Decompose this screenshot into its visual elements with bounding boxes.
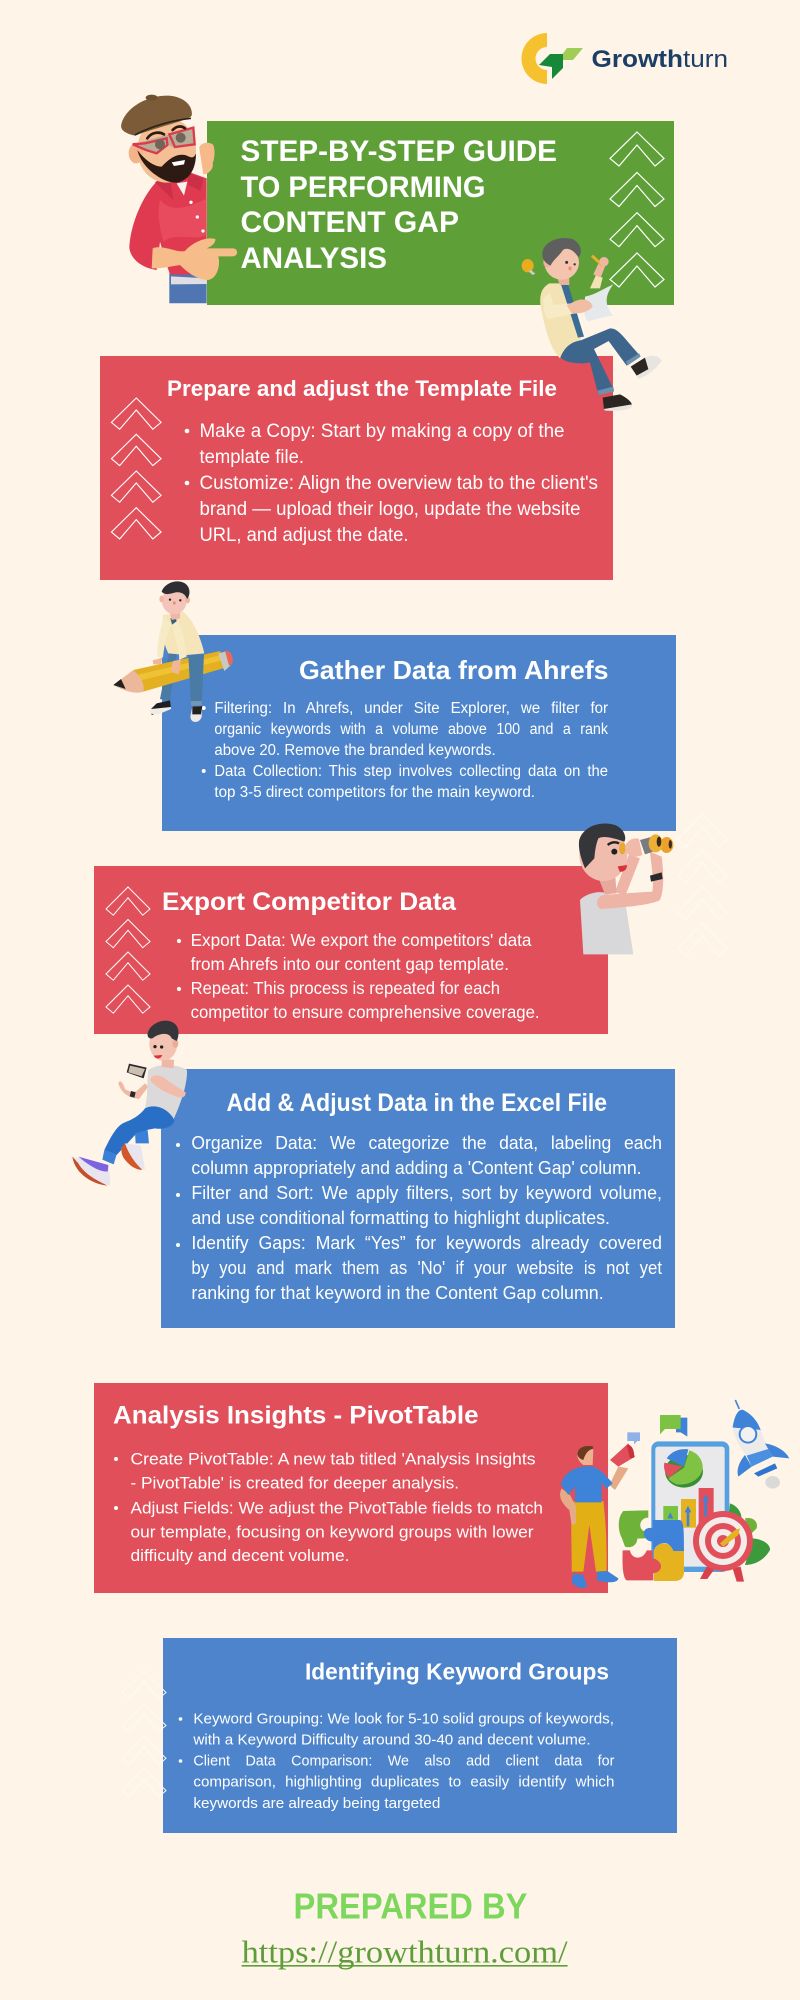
rocket [733,1400,789,1489]
heading: analysis insights: Analysis Insights - PivotTable [113,1401,479,1429]
puzzle pieces [619,1510,684,1581]
bullet list: analysis insights: Create PivotTable: A new tab titled 'Analysis Insights [130,1449,536,1468]
title heading [240,135,557,275]
chevron column: export [106,887,150,1013]
speech bubbles [627,1415,687,1444]
bullet list: analysis insights [114,1449,543,1565]
bullet list: prepare: template file. [200,447,304,468]
panel: export competitor data [94,866,608,1034]
chevron column: identifying keyword groups [122,1670,166,1797]
bullet list: gather data: Filtering: In Ahrefs, under Site Explorer, we filter for [214,700,608,717]
panel: gather data from ahrefs [162,635,676,831]
chevron column: prepare [111,398,161,539]
logo: Growthturn: Growth [592,46,683,73]
bullet list: prepare [185,421,598,546]
illustration: man with beret pointing at title [121,95,237,303]
bullet list: identifying keyword groups: with a Keyword Difficulty around 30-40 and decent volume. [192,1732,591,1748]
bullet list: export [177,930,540,1022]
panel: add and adjust data in the excel file [161,1069,675,1328]
target [693,1511,753,1582]
bullet list: identifying keyword groups: Keyword Grouping: We look for 5-10 solid groups of keywords, [193,1711,614,1728]
illustration: person with binoculars [579,824,673,954]
panel: prepare and adjust the template file [100,356,613,580]
heading: prepare: Prepare and adjust the Template File [167,376,557,401]
heading: gather data: Gather Data from Ahrefs [299,655,608,685]
bullet list: add and adjust: Organize Data: We categorize the data, labeling each [191,1133,662,1153]
bullet list: gather data: organic keywords with a volume above 100 and a rank [214,721,608,738]
bullet list: export: Export Data: We export the competitors' data [191,930,532,950]
bullet list: add and adjust: by you and mark them as 'No' if your website is not yet [191,1258,662,1278]
panel: identifying keyword groups [163,1638,677,1833]
bullet list: add and adjust: column appropriately and adding a 'Content Gap' column. [191,1158,642,1178]
bullet list: analysis insights: our template, focusing on keyword groups with lower [130,1522,534,1542]
footer link: https://growthturn.com/ [242,1934,568,1970]
heading: export: Export Competitor Data [162,888,457,916]
heading: identifying keyword groups: Identifying Keyword Groups [305,1658,609,1684]
chevron column: title panel [610,132,664,287]
bullet list: prepare: Make a Copy: Start by making a copy of the [200,421,564,442]
panel: analysis insights pivot table [94,1383,608,1593]
phone with charts [651,1441,729,1572]
title heading: STEP-BY-STEP GUIDE [240,135,557,168]
illustration: person floating with phone [72,1021,187,1186]
footer heading: prepared by: PREPARED BY [294,1885,528,1926]
decorative faint chevrons: right margin [678,814,727,956]
heading: add and adjust: Add & Adjust Data in the Excel File [226,1089,607,1117]
logo: Growthturn: turn [683,46,728,73]
bullet list: add and adjust: Identify Gaps: Mark “Yes” for keywords already covered [191,1233,662,1253]
bullet list: gather data [202,700,608,801]
bullet list: add and adjust: ranking for that keyword in the Content Gap column. [191,1283,604,1303]
bullet list: analysis insights: difficulty and decent volume. [130,1546,350,1565]
leaves [728,1503,770,1565]
title panel [207,121,674,305]
bullet list: gather data: Data Collection: This step involves collecting data on the [214,763,608,780]
illustration: marketing team with rocket, phone, puzzle and target [560,1400,789,1588]
illustration: person sitting with paper and pencil [522,238,662,411]
illustration: person riding a pencil [113,581,233,722]
bullet list: analysis insights: - PivotTable' is created for deeper analysis. [130,1474,459,1492]
bullet list: add and adjust: and use conditional formatting to highlight duplicates. [191,1208,610,1228]
title heading: TO PERFORMING [240,171,486,204]
bullet list: prepare: Customize: Align the overview tab to the client's [200,473,598,494]
bullet list: gather data: top 3-5 direct competitors for the main keyword. [214,784,535,801]
bullet list: identifying keyword groups: comparison, highlighting duplicates to easily identify which [193,1774,614,1791]
bullet list: identifying keyword groups: keywords are already being targeted [193,1795,440,1812]
title heading: CONTENT GAP [240,206,459,239]
person with megaphone [560,1443,635,1588]
bullet list: prepare: URL, and adjust the date. [200,525,408,546]
bullet list: analysis insights: Adjust Fields: We adjust the PivotTable fields to match [130,1498,543,1517]
bullet list: identifying keyword groups: Client Data Comparison: We also add client data for [193,1753,614,1770]
logo: Growthturn [522,33,728,84]
bullet list: prepare: brand — upload their logo, update the website [200,499,580,520]
bullet list: identifying keyword groups [179,1711,614,1812]
bullet list: export: from Ahrefs into our content gap template. [191,954,509,974]
bullet list: export: Repeat: This process is repeated for each [191,978,500,998]
bullet list: gather data: above 20. Remove the branded keywords. [214,742,496,759]
bullet list: add and adjust: Filter and Sort: We apply filters, sort by keyword volume, [191,1183,662,1203]
title heading: ANALYSIS [240,242,387,275]
bullet list: export: competitor to ensure comprehensive coverage. [191,1002,540,1022]
bullet list: add and adjust [176,1133,662,1303]
